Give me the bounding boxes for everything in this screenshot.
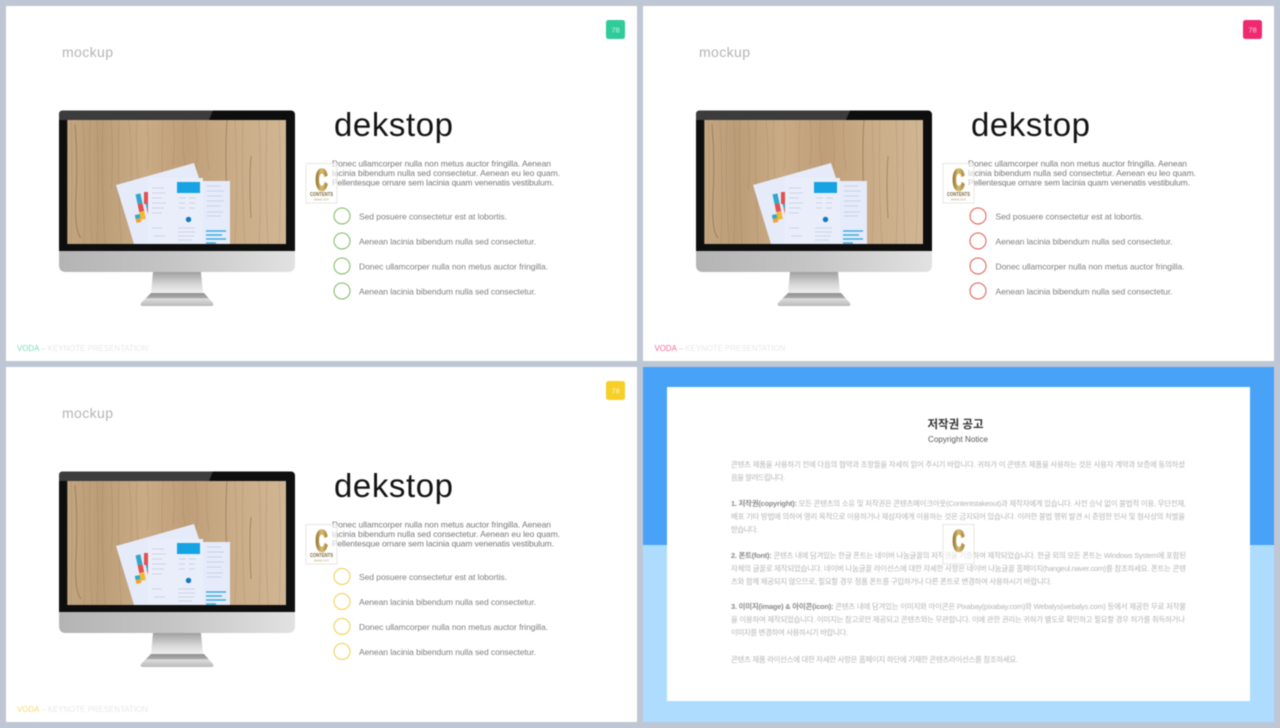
section: font [731, 551, 1186, 586]
panel: green slide [6, 6, 637, 361]
body paragraph: Donec ullamcorper nulla non metus auctor fringilla. Aenean [332, 520, 551, 530]
section: copyright: 받습니다. [731, 525, 758, 534]
heading: mockup: mockup [699, 44, 750, 60]
section: font: 2. 폰트(font): 콘텐츠 내에 담겨있는 한글 폰트는 네이버 나눔글꼴의 저작권을 기증하여 제작되었습니다. 한글 외의 모든 폰트는 Windows System에 포함된 [731, 551, 1186, 560]
panel: copyright notice [643, 367, 1274, 722]
page badge [1243, 20, 1262, 39]
page badge: 78 [611, 26, 620, 34]
body paragraph: Donec ullamcorper nulla non metus auctor fringilla. Aenean [968, 158, 1187, 168]
intro text: 음을 알려드립니다. [731, 473, 785, 482]
intro text: 콘텐츠 제품을 사용하기 전에 다음의 협약과 조항들을 자세히 읽어 주시기 바랍니다. 귀하가 이 콘텐츠 제품을 사용하는 것은 사용자 계약과 보증에 동의하셨 [731, 460, 1185, 469]
section: copyright: 배포 기타 방법에 의하여 영리 목적으로 이용하거나 제삼자에게 이용하는 것은 금지되어 있습니다. 이러한 불법 행위 발견 시 준엄한 민사 및 형사상의 처벌을 [731, 512, 1185, 521]
section: image and icon [731, 602, 1186, 637]
body paragraph: lacinia bibendum nulla sed consectetur. Aenean eu leo quam. [332, 529, 560, 539]
footer: VODA – KEYNOTE PRESENTATION [17, 344, 148, 353]
heading: dekstop: dekstop [971, 106, 1090, 143]
monitor mockup [696, 110, 932, 306]
bullet list: Aenean lacinia bibendum nulla sed consectetur. [359, 597, 536, 607]
watermark logo: CONTENTS [947, 192, 971, 198]
intro text [731, 460, 1185, 482]
watermark logo: C [952, 525, 964, 558]
section: image and icon: 이미지를 변경하여 사용하시기 바랍니다. [731, 628, 848, 637]
body paragraph: Pellentesque ornare sem lacinia quam venenatis vestibulum. [332, 538, 554, 548]
page badge [606, 381, 625, 400]
bullet list [970, 208, 1184, 299]
watermark logo [306, 164, 337, 203]
heading: 저작권 공고: 저작권 공고 [927, 417, 984, 431]
watermark logo [306, 524, 337, 564]
subheading: Copyright Notice [928, 435, 989, 444]
monitor mockup [59, 472, 295, 667]
body paragraph: Donec ullamcorper nulla non metus auctor fringilla. Aenean [332, 158, 551, 168]
bullet list: Donec ullamcorper nulla non metus auctor fringilla. [359, 622, 548, 632]
page badge [606, 20, 625, 39]
watermark logo: MAKE OUT [314, 198, 329, 202]
watermark logo: C [316, 164, 328, 197]
body paragraph [968, 158, 1196, 188]
bullet list: Sed posuere consectetur est at lobortis. [359, 572, 507, 582]
panel: pink slide [643, 6, 1274, 361]
watermark logo: CONTENTS [310, 192, 334, 198]
monitor mockup [59, 110, 295, 306]
section: image and icon: 3. 이미지(image) & 아이콘(icon): 콘텐츠 내에 담겨있는 이미지와 아이콘은 Pixabay(pixabay.com)와 Webalys(webalys.com) 등에서 제공한 무료 저작물 [731, 602, 1186, 611]
footer: VODA – KEYNOTE PRESENTATION [654, 344, 786, 353]
page badge: 78 [611, 386, 620, 396]
bullet list: Aenean lacinia bibendum nulla sed consectetur. [359, 647, 536, 657]
page badge: 78 [1248, 26, 1257, 34]
section: image and icon: 을 이용하여 제작되었습니다. 이미지는 참고로만 제공되고 콘텐츠와는 무관합니다. 이에 관한 권리는 귀하가 별도로 확인하고 필요할 경우 허가를 취득하거나 [731, 615, 1185, 624]
bullet list [334, 208, 548, 299]
heading: mockup: mockup [62, 44, 113, 60]
bullet list: Aenean lacinia bibendum nulla sed consectetur. [359, 286, 536, 296]
watermark logo: MAKE OUT [314, 558, 329, 562]
section: copyright: 1. 저작권(copyright): 모든 콘텐츠의 소유 및 저작권은 콘텐츠메이크아웃(Contentstakeout)과 제작자에게 있습니다. 사전 승낙 없이 불법적 이용, 무단전재, [731, 499, 1186, 508]
bullet list: Aenean lacinia bibendum nulla sed consectetur. [996, 286, 1172, 296]
closing text: 콘텐츠 제품 라이선스에 대한 자세한 사항은 홈페이지 하단에 기재한 콘텐츠라이선스를 참조하세요. [731, 655, 1018, 664]
section: copyright [731, 499, 1186, 534]
watermark logo [943, 524, 974, 564]
bullet list: Sed posuere consectetur est at lobortis. [996, 212, 1144, 222]
heading: dekstop: dekstop [334, 467, 453, 504]
body paragraph: lacinia bibendum nulla sed consectetur. Aenean eu leo quam. [968, 168, 1196, 178]
body paragraph [332, 158, 560, 188]
bullet list: Donec ullamcorper nulla non metus auctor fringilla. [996, 262, 1184, 272]
bullet list: Aenean lacinia bibendum nulla sed consectetur. [996, 236, 1172, 246]
footer: VODA – KEYNOTE PRESENTATION [17, 705, 148, 714]
section: font: 츠와 함께 제공되지 않으므로, 필요할 경우 정품 폰트를 구입하거나 다른 폰트로 변경하여 사용하시기 바랍니다. [731, 577, 1052, 586]
bullet list: Sed posuere consectetur est at lobortis. [359, 212, 507, 222]
section: font: 자체의 글꼴로 제작되었습니다. 네이버 나눔글꼴 라이선스에 대한 자세한 사항은 네이버 나눔글꼴 홈페이지(hangeul.naver.com)를 참조하세요. 폰트는 콘텐 [731, 564, 1186, 573]
watermark logo: CONTENTS [310, 553, 334, 559]
watermark logo: C [316, 525, 328, 558]
heading: mockup: mockup [62, 405, 113, 421]
watermark logo [943, 164, 974, 203]
body paragraph: lacinia bibendum nulla sed consectetur. Aenean eu leo quam. [332, 168, 560, 178]
body paragraph: Pellentesque ornare sem lacinia quam venenatis vestibulum. [332, 178, 554, 188]
body paragraph: Pellentesque ornare sem lacinia quam venenatis vestibulum. [968, 178, 1190, 188]
body paragraph [332, 520, 560, 548]
panel: yellow slide [6, 367, 637, 722]
watermark logo: MAKE OUT [951, 198, 966, 202]
bullet list [334, 568, 548, 660]
heading: dekstop: dekstop [334, 106, 453, 143]
bullet list: Donec ullamcorper nulla non metus auctor fringilla. [359, 262, 548, 272]
watermark logo: C [952, 164, 964, 197]
bullet list: Aenean lacinia bibendum nulla sed consectetur. [359, 236, 536, 246]
